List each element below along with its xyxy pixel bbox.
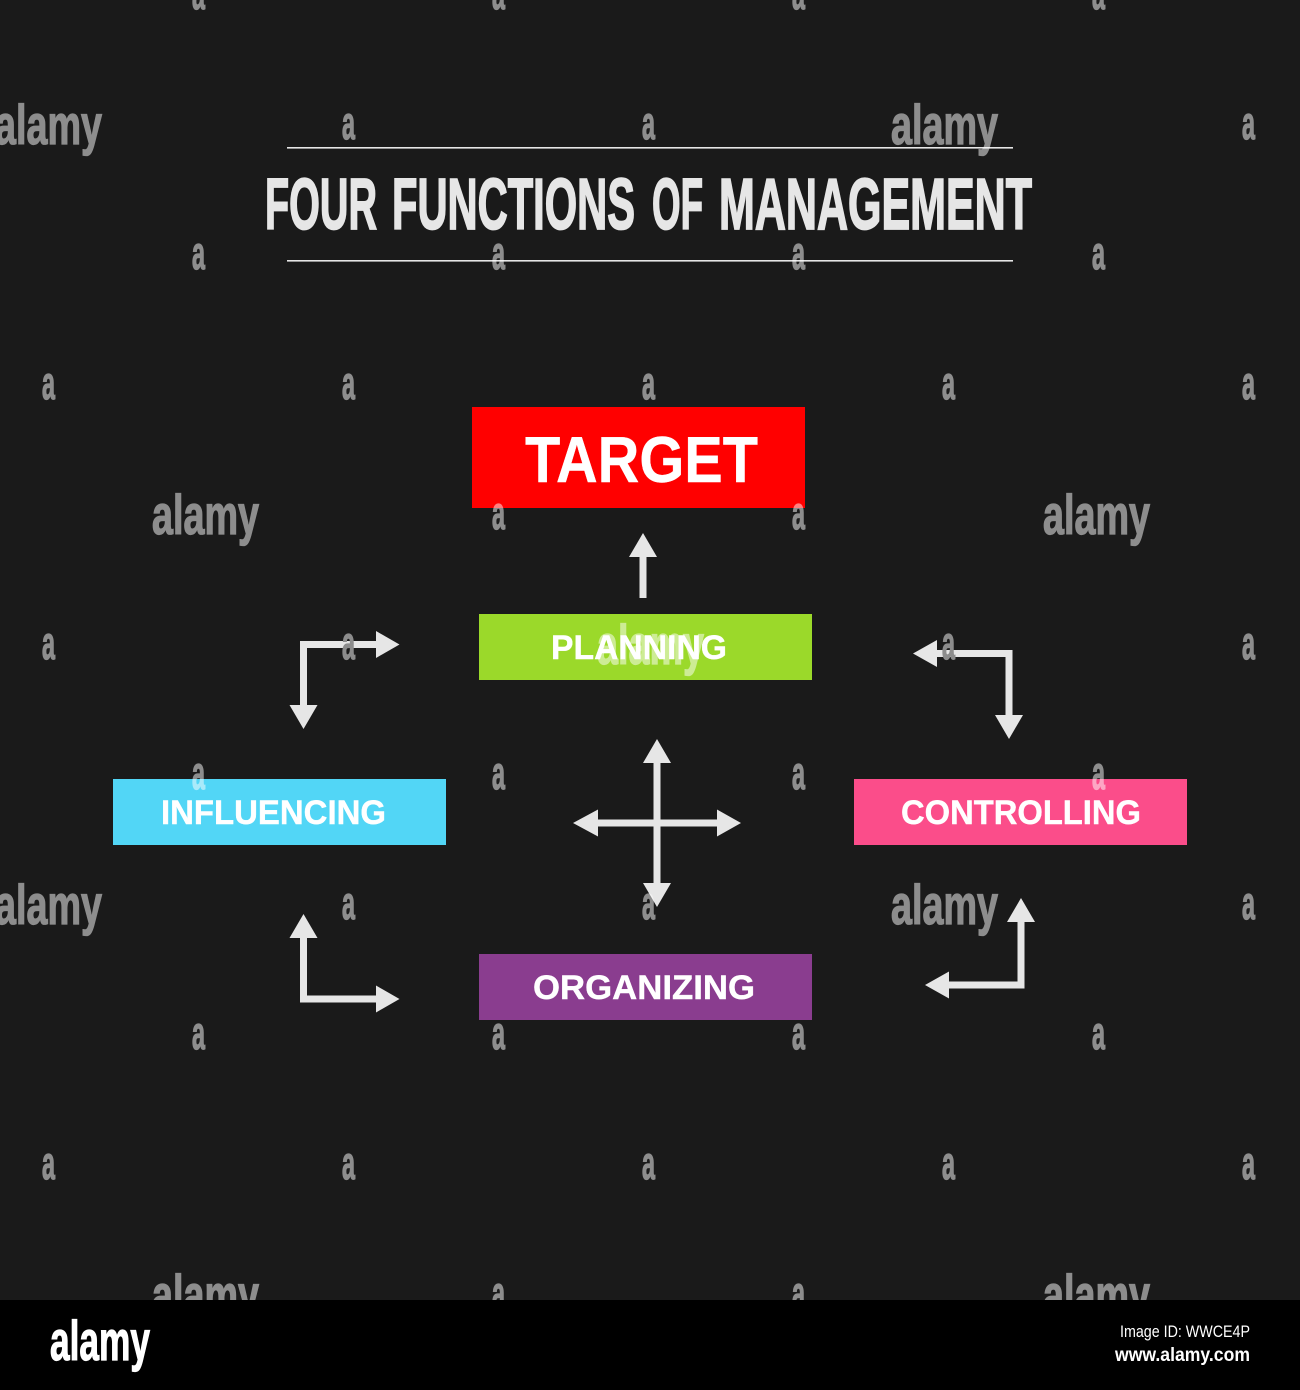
watermark pattern: a — [342, 877, 355, 929]
watermark pattern: a — [492, 487, 505, 539]
watermark pattern: a — [192, 1007, 205, 1059]
title: MANAGEMENT — [719, 165, 1032, 245]
watermark pattern: a — [792, 487, 805, 539]
arrow: planning and controlling — [913, 640, 1023, 739]
watermark pattern: a — [942, 1137, 955, 1189]
footer site url: www.alamy.com — [1114, 1345, 1250, 1366]
box: target — [472, 407, 805, 508]
box: planning: PLANNING — [551, 629, 727, 667]
box: influencing — [113, 779, 446, 845]
watermark pattern: a — [42, 617, 55, 669]
watermark pattern: alamy — [152, 1263, 259, 1326]
watermark pattern: a — [1092, 227, 1105, 279]
watermark pattern: a — [192, 227, 205, 279]
watermark pattern: a — [792, 747, 805, 799]
watermark pattern: alamy — [597, 613, 704, 676]
watermark pattern: alamy — [891, 93, 998, 156]
box: controlling: CONTROLLING — [901, 794, 1141, 832]
title: FOUR — [265, 165, 377, 245]
watermark pattern: a — [342, 97, 355, 149]
watermark pattern: a — [642, 1137, 655, 1189]
watermark pattern: alamy — [1043, 483, 1150, 546]
watermark pattern: a — [192, 747, 205, 799]
watermark pattern: a — [792, 1267, 805, 1319]
watermark pattern: alamy — [891, 873, 998, 936]
box: organizing — [479, 954, 812, 1020]
watermark pattern: a — [792, 227, 805, 279]
watermark pattern: alamy — [1043, 1263, 1150, 1326]
watermark pattern: a — [42, 1137, 55, 1189]
watermark pattern: a — [492, 1267, 505, 1319]
watermark pattern: a — [642, 357, 655, 409]
watermark pattern: a — [492, 227, 505, 279]
box: controlling — [854, 779, 1187, 845]
watermark pattern: a — [492, 747, 505, 799]
watermark pattern: a — [1242, 357, 1255, 409]
arrow: organizing and controlling — [925, 898, 1035, 998]
footer logo: alamy — [50, 1309, 150, 1372]
watermark pattern: a — [1242, 877, 1255, 929]
watermark pattern: a — [342, 357, 355, 409]
watermark pattern: a — [42, 357, 55, 409]
watermark pattern: a — [642, 877, 655, 929]
watermark pattern: a — [1092, 1007, 1105, 1059]
box: organizing: ORGANIZING — [533, 969, 755, 1007]
box: influencing: INFLUENCING — [161, 794, 386, 832]
watermark pattern: a — [1242, 1137, 1255, 1189]
watermark pattern: a — [942, 357, 955, 409]
watermark pattern: a — [792, 1007, 805, 1059]
footer bar — [0, 1300, 1300, 1390]
watermark pattern: a — [342, 1137, 355, 1189]
title — [265, 165, 1032, 245]
box: target: TARGET — [525, 423, 758, 496]
watermark pattern: a — [1242, 617, 1255, 669]
arrow: influencing and organizing — [290, 914, 400, 1012]
watermark pattern: a — [642, 97, 655, 149]
title: FUNCTIONS — [392, 165, 635, 245]
watermark pattern: a — [492, 1007, 505, 1059]
watermark pattern: a — [942, 617, 955, 669]
watermark pattern: a — [1092, 747, 1105, 799]
title block — [265, 147, 1032, 262]
footer image id: Image ID: WWCE4P — [1120, 1322, 1250, 1341]
arrow: influencing and planning — [290, 631, 400, 729]
watermark pattern: a — [1242, 97, 1255, 149]
arrow: central four-way cross — [573, 739, 741, 907]
arrow: planning to target — [629, 533, 657, 598]
title: OF — [652, 165, 703, 245]
watermark pattern: alamy — [152, 483, 259, 546]
box: planning — [479, 614, 812, 680]
watermark pattern: a — [342, 617, 355, 669]
